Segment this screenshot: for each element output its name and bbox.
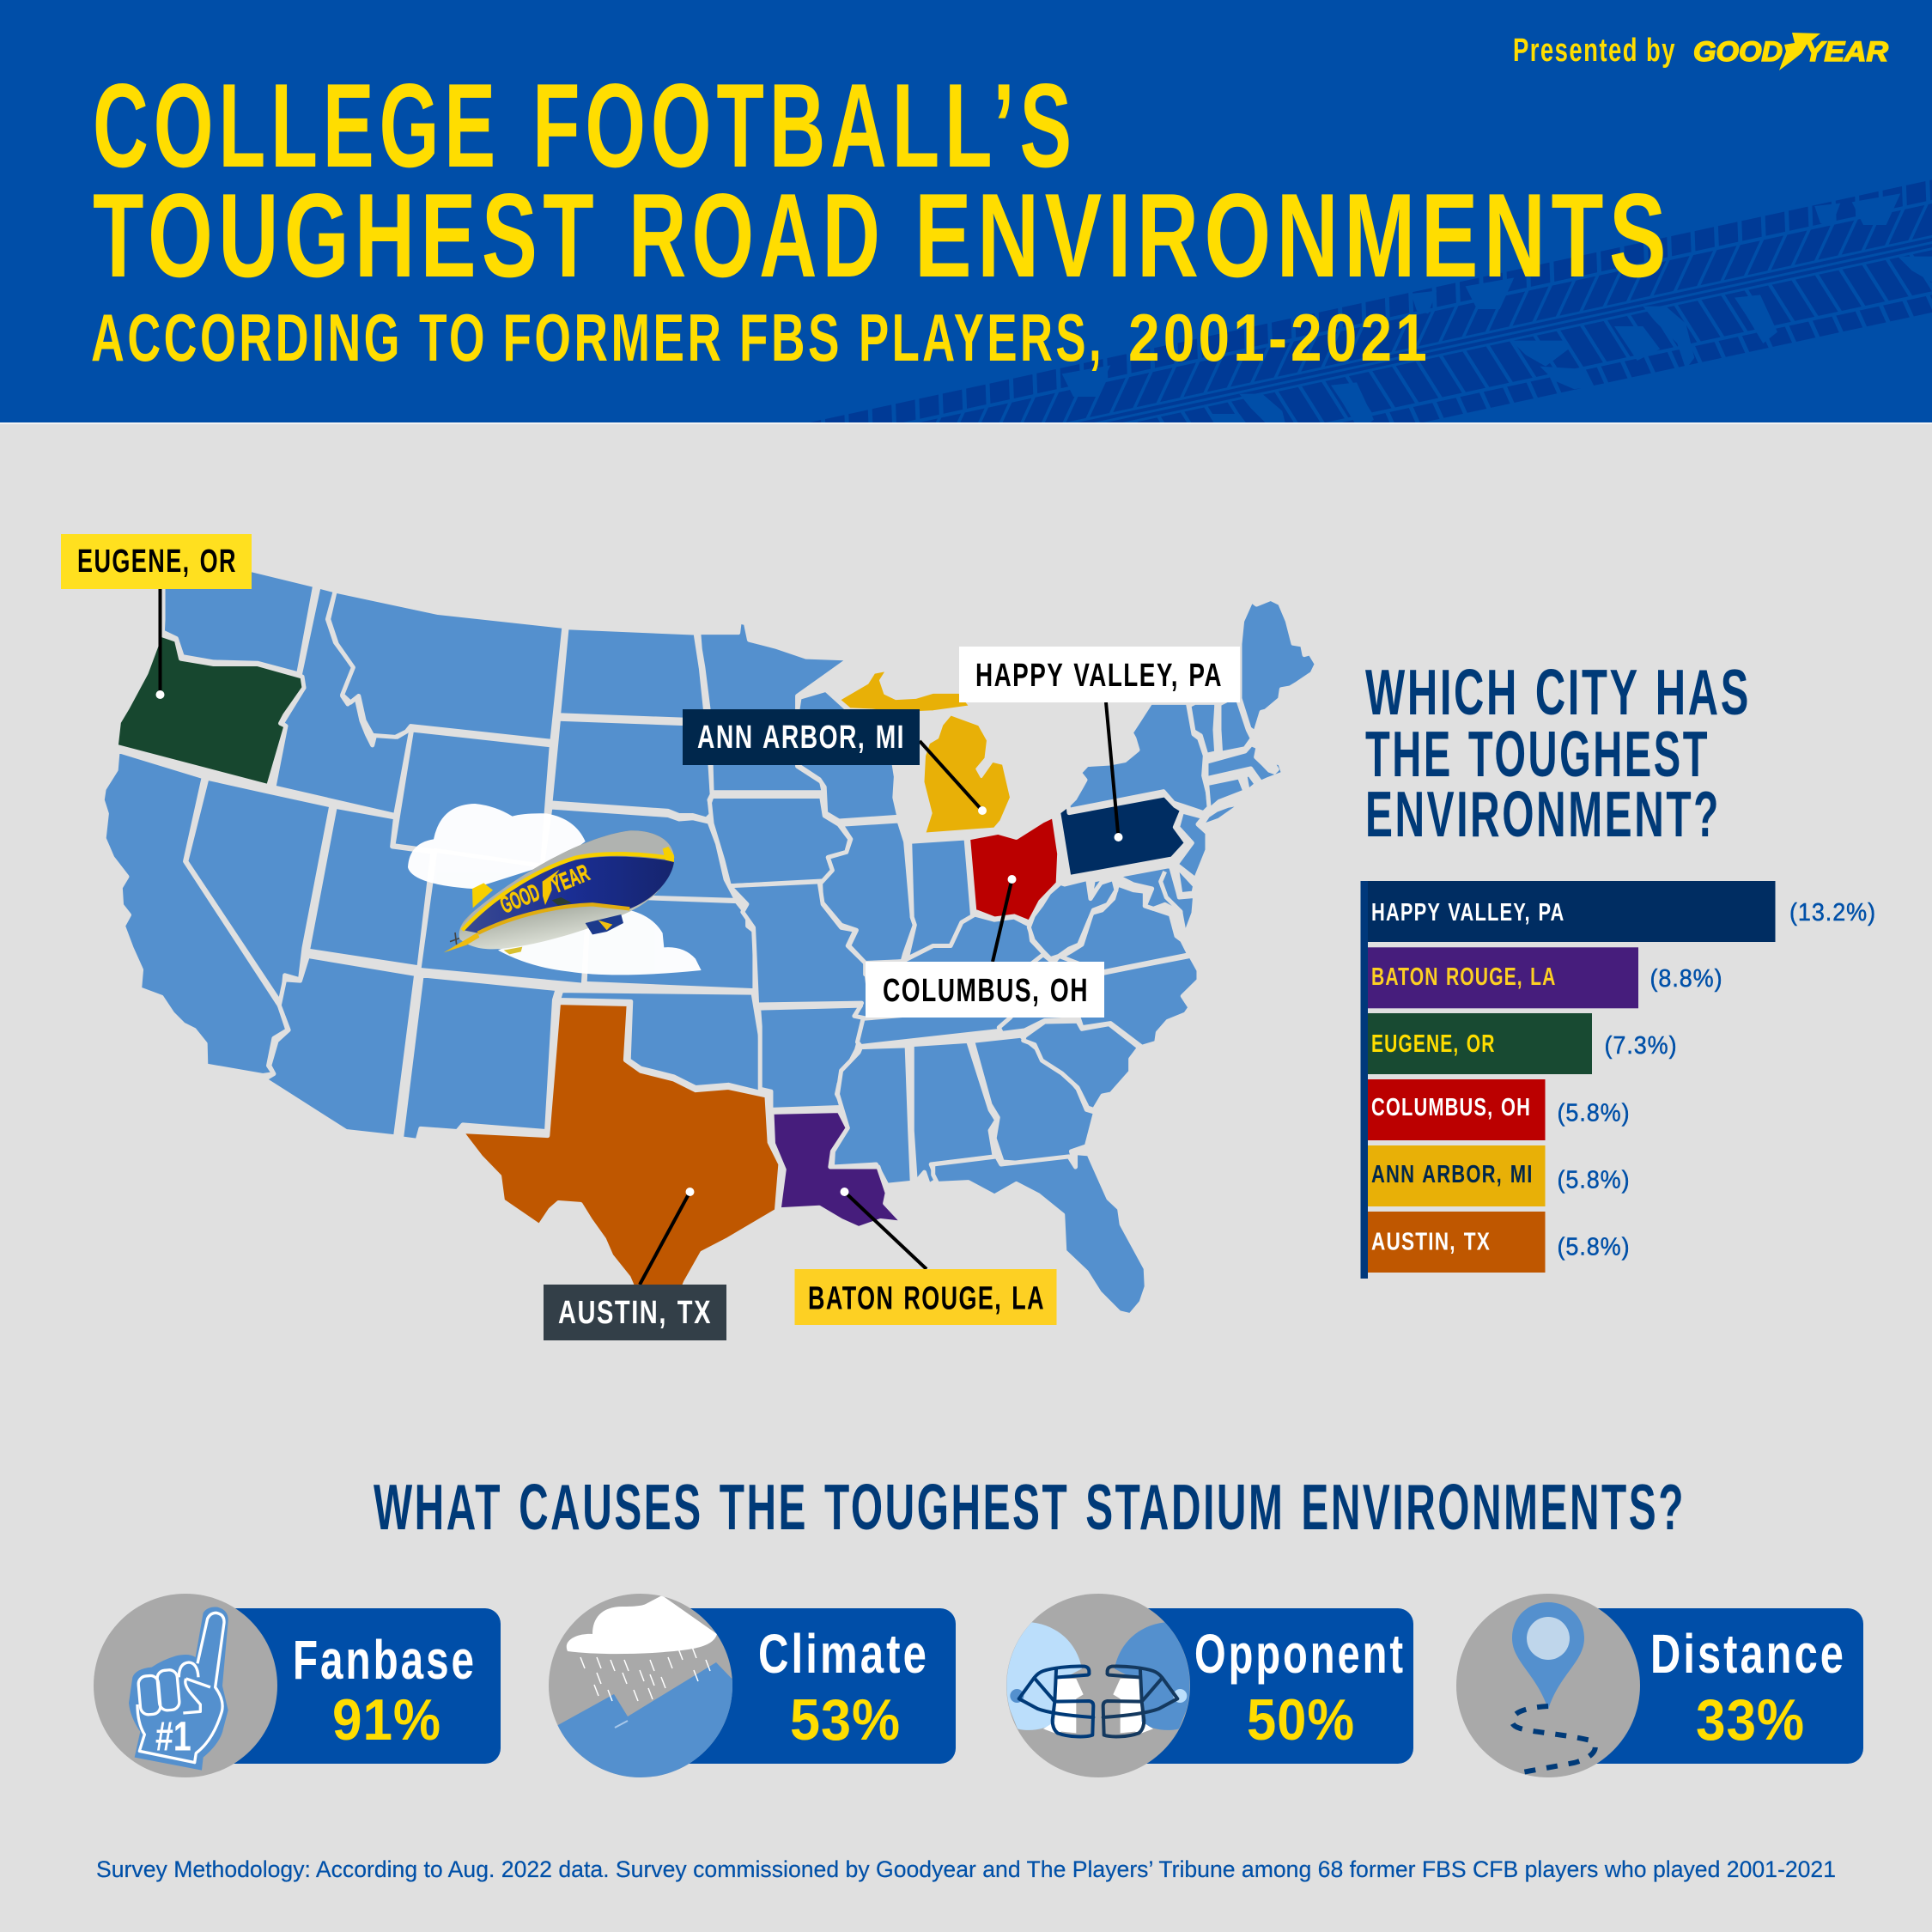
presented by Goodyear logo: Presented by xyxy=(1513,33,1676,69)
heading: which city has the toughest environment: ENVIRONMENT? xyxy=(1365,778,1721,850)
bar: Austin: AUSTIN, TX xyxy=(1371,1229,1491,1256)
value: 91%: 91% xyxy=(332,1687,441,1753)
northeastern states xyxy=(1067,598,1316,879)
bar: Ann Arbor: ANN ARBOR, MI xyxy=(1371,1161,1534,1188)
callout: Ann Arbor, MI: ANN ARBOR, MI xyxy=(697,720,905,756)
blimp: GOOD xyxy=(496,878,544,919)
callout: Happy Valley, PA: HAPPY VALLEY, PA xyxy=(975,658,1223,694)
mid-Atlantic and Carolinas xyxy=(999,866,1199,1110)
blimp: YEAR xyxy=(547,860,593,898)
bar: Baton Rouge: (8.8%) xyxy=(1650,965,1722,993)
subtitle: FBS xyxy=(739,300,842,375)
subtitle: 2001-2021 xyxy=(1128,300,1431,375)
bar: Happy Valley xyxy=(1368,881,1876,942)
heading: which city has the toughest environment xyxy=(1365,656,1751,850)
panel: Fanbase xyxy=(94,1594,501,1777)
state: Oregon xyxy=(116,635,304,787)
icon: foam finger: #1 xyxy=(155,1713,191,1759)
label: Climate: Climate xyxy=(758,1623,929,1685)
callout: Eugene, OR xyxy=(61,534,252,699)
clouds xyxy=(408,804,702,975)
bar: Columbus xyxy=(1368,1079,1630,1140)
heading: which city has the toughest environment: THE TOUGHEST xyxy=(1365,718,1710,790)
callout: Ann Arbor, MI xyxy=(683,709,987,815)
state: Texas xyxy=(461,1003,781,1303)
bar axis xyxy=(1360,881,1368,1279)
subtitle: ACCORDING xyxy=(91,300,403,375)
footer: survey methodology: Survey Methodology: According to Aug. 2022 data. Survey commissioned by Goodyear and The Players’ Tribune among 68 former FBS CFB players who played 2001-2021 xyxy=(96,1856,1836,1882)
icon: map pin and route xyxy=(1512,1602,1595,1772)
title xyxy=(93,59,1672,302)
title: ROAD xyxy=(629,169,885,302)
bar: Austin xyxy=(1368,1212,1630,1273)
bar: Baton Rouge xyxy=(1368,947,1722,1008)
blimp and clouds xyxy=(408,804,702,975)
callout: Baton Rouge, LA: BATON ROUGE, LA xyxy=(808,1281,1045,1317)
state: Louisiana xyxy=(772,1111,903,1229)
bar: Happy Valley: (13.2%) xyxy=(1789,899,1876,927)
subtitle: PLAYERS, xyxy=(859,300,1104,375)
presented by Goodyear logo: YEAR xyxy=(1804,36,1888,67)
icon: football helmets xyxy=(1000,1622,1196,1736)
value: 33%: 33% xyxy=(1696,1687,1805,1753)
presented by Goodyear logo xyxy=(1513,33,1888,70)
bar: Happy Valley: HAPPY VALLEY, PA xyxy=(1371,899,1564,927)
US map xyxy=(102,570,1316,1315)
title: COLLEGE xyxy=(93,59,501,192)
value: 53%: 53% xyxy=(790,1687,901,1753)
value: 50%: 50% xyxy=(1247,1687,1355,1753)
callout: Eugene, OR: EUGENE, OR xyxy=(77,544,237,580)
callout: Columbus, OH xyxy=(866,875,1104,1018)
presented by Goodyear logo: GOOD xyxy=(1693,36,1783,67)
tire track texture xyxy=(786,119,1932,554)
label: Fanbase: Fanbase xyxy=(293,1629,477,1691)
icon: foam finger xyxy=(129,1607,228,1771)
label: Distance: Distance xyxy=(1650,1623,1846,1685)
bar: Columbus: COLUMBUS, OH xyxy=(1371,1094,1531,1121)
bar: Columbus: (5.8%) xyxy=(1558,1100,1630,1127)
callout: Baton Rouge, LA xyxy=(795,1188,1056,1325)
state: Ohio xyxy=(969,816,1060,922)
state: Michigan xyxy=(839,670,1012,834)
blimp xyxy=(444,830,674,954)
bar: Eugene: (7.3%) xyxy=(1604,1032,1678,1060)
subtitle xyxy=(91,300,1431,375)
state: Pennsylvania xyxy=(1059,795,1187,878)
bar: Ann Arbor: (5.8%) xyxy=(1558,1167,1630,1194)
panel: Climate xyxy=(541,1594,956,1786)
callout: Columbus, OH: COLUMBUS, OH xyxy=(883,973,1089,1009)
bar chart: toughest city xyxy=(1360,881,1876,1279)
subtitle: TO xyxy=(419,300,488,375)
central and southeastern states xyxy=(699,622,1146,1315)
bar: Baton Rouge: BATON ROUGE, LA xyxy=(1371,963,1556,991)
bar: Eugene: EUGENE, OR xyxy=(1371,1030,1496,1058)
bar: Austin: (5.8%) xyxy=(1558,1234,1630,1261)
bar: Ann Arbor xyxy=(1368,1145,1630,1206)
title: TOUGHEST xyxy=(93,169,599,302)
panel: Opponent xyxy=(1000,1594,1413,1777)
callout: Happy Valley, PA xyxy=(959,647,1240,841)
header banner xyxy=(0,0,1932,424)
bar: Eugene xyxy=(1368,1013,1678,1074)
label: Opponent: Opponent xyxy=(1194,1623,1406,1685)
callout: Austin, TX: AUSTIN, TX xyxy=(558,1295,712,1331)
western states xyxy=(102,570,762,1140)
icon: rain cloud on stadium xyxy=(558,1595,732,1777)
panel: Distance xyxy=(1456,1594,1863,1777)
title: FOOTBALL’S xyxy=(532,59,1077,192)
callout: Austin, TX xyxy=(544,1188,726,1340)
subtitle: FORMER xyxy=(503,300,725,375)
